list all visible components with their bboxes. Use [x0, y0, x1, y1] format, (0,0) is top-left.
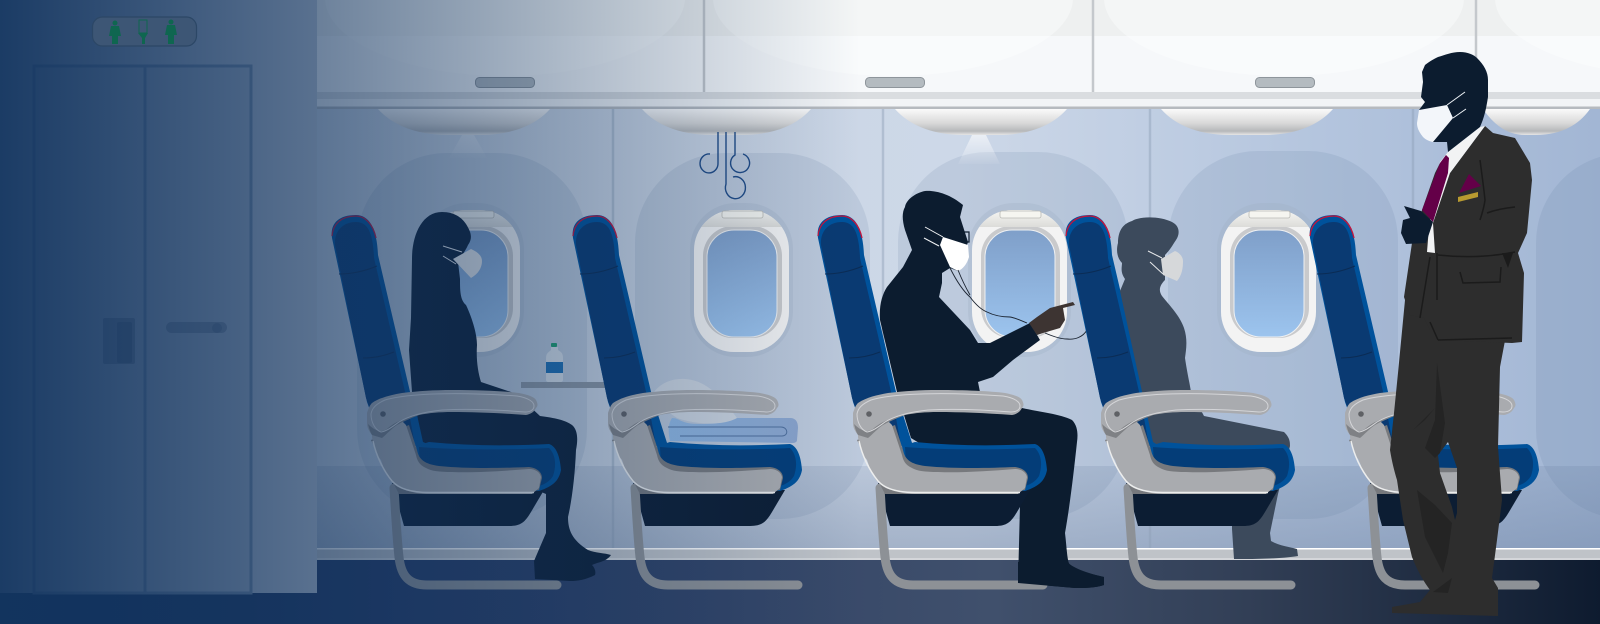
seat 2 with pillow and blanket	[573, 215, 802, 585]
baseboard	[317, 548, 1600, 560]
pillow	[650, 379, 737, 424]
bin highlight ellipses	[325, 0, 1600, 76]
jacket shadow	[1502, 253, 1513, 268]
air flow swirl icon	[700, 132, 750, 199]
trousers	[1390, 290, 1507, 616]
bin dividers	[704, 0, 1476, 93]
door latch	[103, 318, 135, 364]
water bottle	[546, 343, 563, 382]
window 3	[968, 203, 1071, 357]
pocket square	[1459, 174, 1481, 193]
passenger 3 foot	[1018, 562, 1104, 588]
face mask	[940, 237, 969, 271]
seat 1 with passenger	[332, 212, 611, 585]
cabin wall	[317, 105, 1600, 555]
mask straps	[924, 227, 943, 246]
seat 4 with passenger	[1066, 215, 1298, 585]
window surround halos	[357, 151, 1600, 519]
pointing hand	[1029, 302, 1075, 335]
passenger service units	[378, 109, 1590, 135]
jacket details	[1420, 160, 1515, 340]
window 1	[421, 203, 524, 357]
bin handles	[476, 78, 1314, 88]
glasses	[964, 232, 969, 242]
head	[1419, 52, 1488, 152]
tray table with bottle	[521, 343, 609, 388]
mask	[443, 246, 482, 278]
window 2	[690, 203, 793, 357]
lavatory door	[34, 66, 251, 593]
lavatory sign	[92, 17, 196, 46]
seat 5	[1310, 215, 1539, 585]
icon: person	[109, 20, 121, 44]
blanket	[668, 418, 798, 443]
hand	[1401, 206, 1433, 244]
passenger 1 silhouette	[409, 212, 611, 581]
floor	[0, 560, 1600, 624]
flight attendant standing	[1390, 52, 1532, 616]
seat 3 with passenger	[818, 191, 1104, 588]
reading light cones	[449, 135, 1000, 164]
passenger 4 silhouette	[1117, 217, 1298, 559]
pin badge	[1458, 192, 1478, 202]
lavatory wall	[0, 0, 317, 593]
trouser folds	[1413, 363, 1452, 593]
bin rail	[317, 92, 1600, 109]
earphone wires	[950, 268, 1087, 339]
window 4	[1217, 203, 1320, 357]
face mask	[1417, 105, 1453, 142]
mask straps	[1447, 92, 1466, 118]
lower wall band	[317, 466, 1600, 550]
passenger 3 silhouette	[880, 191, 1104, 588]
wall panel seams	[613, 109, 1413, 549]
tie	[1422, 155, 1449, 222]
door handle	[166, 322, 227, 333]
icon: sink	[138, 20, 148, 44]
cabin shadow gradient overlay	[0, 0, 860, 624]
icon: person	[165, 20, 177, 44]
shirt	[1427, 126, 1485, 253]
jacket	[1404, 126, 1532, 343]
overhead bins	[317, 0, 1600, 93]
mask	[1148, 251, 1183, 281]
